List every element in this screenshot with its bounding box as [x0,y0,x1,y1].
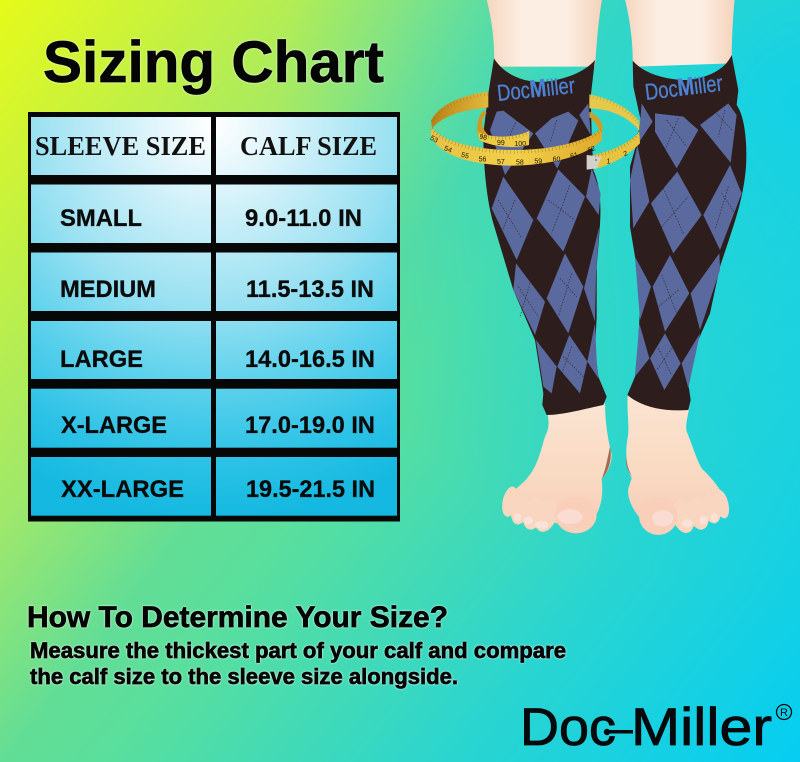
sizing table [28,112,400,522]
tape numbers: 61 [570,152,579,160]
instructions text [30,638,566,689]
header row: CALF SIZE [240,131,377,161]
brand logo: R [780,707,788,719]
measuring tape [429,92,640,170]
instructions text: Measure the thickest part of your calf and compare [30,638,566,663]
tape numbers: 56 [479,157,487,164]
left foot toes [500,485,597,535]
header row: SLEEVE SIZE [35,131,206,161]
left sleeve brand mark: DocMiller [496,71,576,106]
bare feet [500,395,732,536]
brand logo: Doc [520,698,616,757]
row: x-large: X-LARGE [61,412,167,439]
right sleeve brand mark: DocMiller [643,69,724,105]
tape numbers: 54 [443,145,453,155]
header row [31,117,397,175]
tape numbers [429,134,629,167]
tape numbers: 100 [514,141,526,148]
tape numbers: 60 [553,157,561,164]
brand logo: Miller [631,698,772,757]
row: medium [31,252,397,311]
row: large [31,321,397,379]
brand logo [520,698,792,757]
tape numbers: 53 [429,135,439,145]
row: x-large [31,389,397,448]
tape numbers: 59 [534,159,542,166]
thighs and knees [487,0,735,67]
how to determine heading: How To Determine Your Size? [27,601,448,634]
title: Sizing Chart [43,30,384,95]
tape numbers: 98 [479,134,488,142]
tape numbers: 55 [460,152,470,160]
row: large: 14.0-16.5 IN [245,346,375,373]
tape numbers: 99 [497,140,505,147]
right sleeve [627,55,746,410]
tape numbers: 58 [516,160,524,167]
row: small: 9.0-11.0 IN [245,205,362,232]
left sleeve [483,58,607,415]
row: medium: MEDIUM [60,276,156,303]
row: small: SMALL [60,205,142,232]
legs photo illustration [429,0,746,536]
right foot toes [639,488,732,536]
row: xx-large: XX-LARGE [61,476,184,503]
tape numbers: 1 [607,158,611,165]
instructions text: the calf size to the sleeve size alongside. [30,664,458,689]
tape numbers: 2 [623,150,629,158]
row: x-large: 17.0-19.0 IN [245,412,375,439]
row: xx-large [31,457,397,516]
tape numbers: 57 [497,159,505,166]
row: medium: 11.5-13.5 IN [246,276,374,303]
row: large: LARGE [60,346,143,373]
tape numbers: 62 [587,145,597,154]
row: small [31,184,397,243]
row: xx-large: 19.5-21.5 IN [246,476,375,503]
